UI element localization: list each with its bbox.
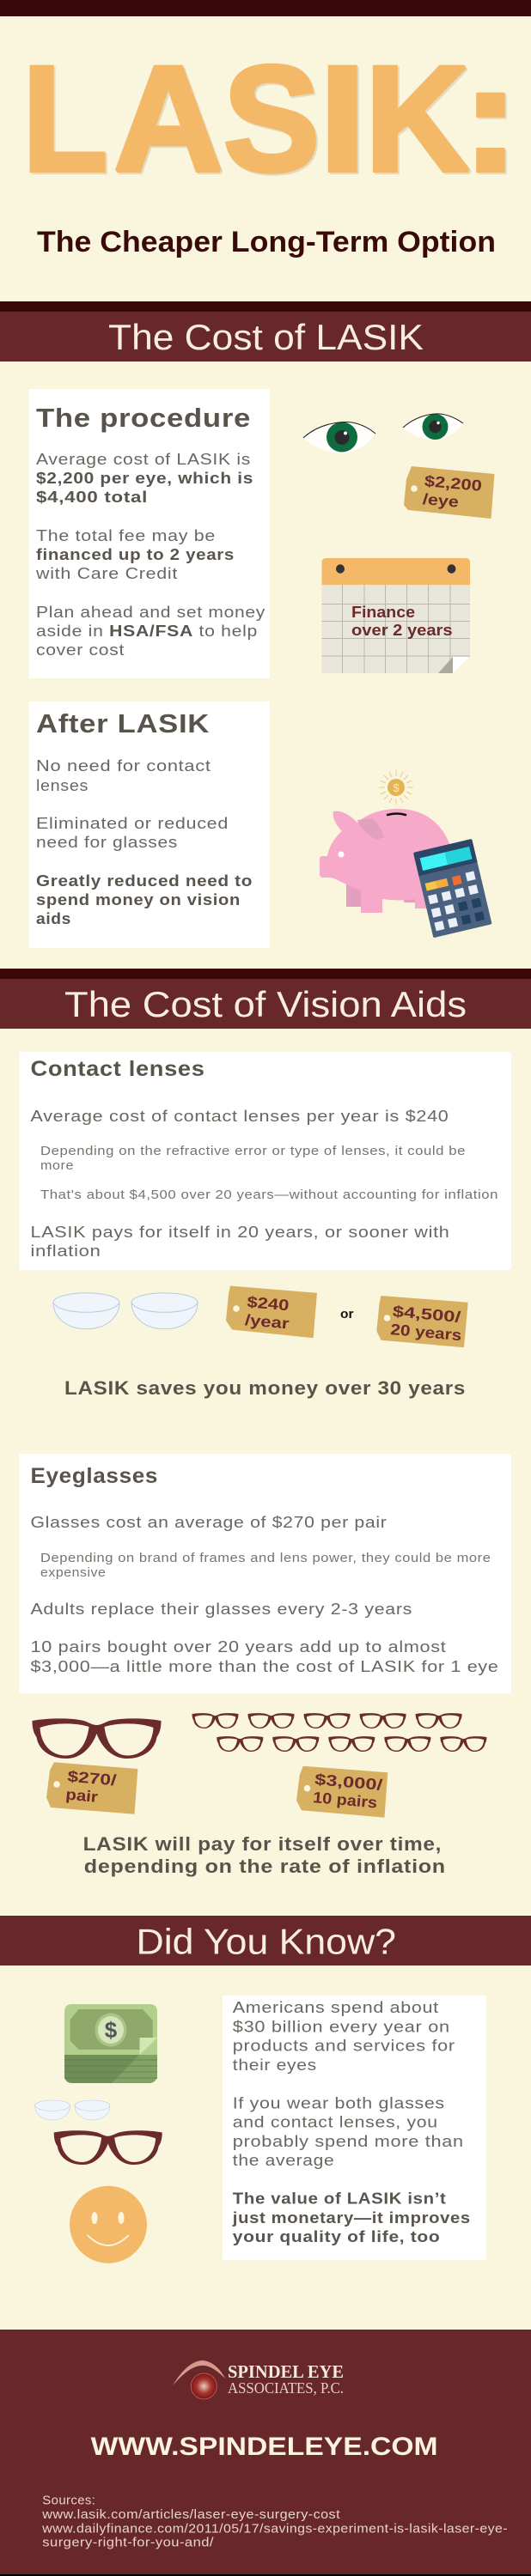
price tag: $2,200 per eye (404, 466, 495, 519)
text: both glasses and contacts: If you wear both glasses (233, 2094, 445, 2112)
sources (41, 2494, 508, 2550)
label: or: or (340, 1307, 354, 1321)
heading: after LASIK: After LASIK (36, 708, 210, 738)
text: 10 pairs total (31, 1637, 498, 1675)
title: LASIK: I (320, 35, 366, 203)
price tag: $2,200 per eye: /eye (422, 490, 460, 511)
text: average cost (36, 450, 253, 506)
price tag: $270 per pair (46, 1762, 137, 1814)
text: Americans spend: their eyes (233, 2056, 317, 2074)
title: LASIK: S (223, 35, 320, 203)
text: replacement rate: Adults replace their glasses every 2-3 years (31, 1600, 412, 1618)
sources: Sources: (42, 2494, 95, 2508)
text: Americans spend: $30 billion every year on (233, 2018, 450, 2036)
title: LASIK (22, 34, 519, 203)
title: LASIK: : (462, 34, 519, 203)
icon: contact lenses pair (53, 1293, 198, 1329)
text: LASIK pays for itself (31, 1223, 450, 1260)
price tag: $4,500 per 20 years: 20 years (390, 1321, 462, 1344)
heading: contact lenses: Contact lenses (31, 1057, 204, 1081)
text: 20 year total: That's about $4,500 over 20 years—without accounting for inflation (40, 1188, 498, 1202)
text: reduced glasses: Eliminated or reduced (36, 814, 229, 832)
icon: calendar: over 2 years (351, 622, 453, 639)
text: both glasses and contacts: probably spend more than (233, 2132, 464, 2150)
price tag: $3,000 per 10 pairs: 10 pairs (312, 1789, 378, 1812)
text: both glasses and contacts (233, 2094, 464, 2169)
icon: smiley face (70, 2186, 147, 2263)
price tag: $240 per year: $240 (247, 1293, 290, 1314)
sources: www.dailyfinance.com/2011/05/17/savings-experiment-is-lasik-laser-eye- (41, 2521, 508, 2536)
panel: after LASIK (29, 702, 270, 948)
text: reduced spending: aids (36, 909, 71, 927)
text: value of LASIK: your quality of life, too (233, 2227, 440, 2245)
section banner: Did You Know? (0, 1916, 531, 1965)
footer (0, 2330, 531, 2576)
icon: green eyes (303, 414, 463, 453)
price tag: $270 per pair: pair (65, 1786, 99, 1806)
text: Americans spend: products and services for (233, 2037, 455, 2055)
text: reduced glasses: need for glasses (36, 833, 178, 851)
section banner: Did You Know?: Did You Know? (136, 1922, 396, 1962)
price tag: $270 per pair: $270/ (67, 1768, 117, 1789)
title: LASIK: K (365, 35, 469, 203)
heading: eyeglasses: Eyeglasses (31, 1464, 158, 1488)
icon: stack of money: $ (105, 2017, 118, 2043)
title: LASIK: A (113, 35, 223, 203)
text: HSA/FSA (36, 603, 266, 659)
text: depends on frames (40, 1552, 491, 1580)
icon: stack of money (64, 2004, 157, 2083)
text: financing: The total fee may be (36, 526, 216, 544)
panel: did you know facts (223, 1996, 486, 2260)
text: both glasses and contacts: and contact lenses, you (233, 2113, 438, 2131)
text: average cost: Average cost of LASIK is (36, 450, 251, 468)
text: value of LASIK (232, 2190, 471, 2245)
icon: piggy bank (320, 809, 455, 913)
icon: ten pairs of glasses (192, 1713, 486, 1752)
logo: Spindel Eye Associates: ASSOCIATES, P.C. (228, 2379, 344, 2397)
panel: the procedure (29, 389, 270, 678)
subtitle: The Cheaper Long-Term Option (37, 226, 496, 258)
sources: www.lasik.com/articles/laser-eye-surgery-cost (41, 2507, 340, 2522)
price tag: $3,000 per 10 pairs: $3,000/ (314, 1771, 383, 1794)
top bar (0, 0, 531, 16)
text: average cost: $2,200 per eye, which is (36, 469, 253, 487)
icon: large glasses (33, 1718, 162, 1759)
price tag: $240 per year (226, 1286, 317, 1338)
text: value of LASIK: just monetary—it improves (232, 2208, 471, 2227)
heading: the procedure: The procedure (36, 403, 251, 433)
section banner: The Cost of LASIK: The Cost of LASIK (108, 317, 424, 357)
logo: Spindel Eye Associates (173, 2360, 344, 2399)
text: value of LASIK: The value of LASIK isn’t (233, 2190, 447, 2208)
callout: LASIK will pay for itself: depending on the rate of inflation (84, 1856, 446, 1877)
text: reduced spending (36, 872, 253, 927)
text: financing: financed up to 2 years (36, 545, 235, 563)
text: HSA/FSA: Plan ahead and set money (36, 603, 266, 621)
callout: LASIK will pay for itself: LASIK will pay for itself over time, (83, 1833, 442, 1855)
icon: coin (379, 770, 413, 805)
text: no contact lenses: No need for contact (36, 756, 211, 775)
text: depends on refractive error: more (40, 1159, 74, 1173)
price tag: $3,000 per 10 pairs (296, 1766, 388, 1818)
text: depends on frames: Depending on brand of frames and lens power, they could be more (40, 1552, 491, 1565)
text: Americans spend: Americans spend about (233, 1998, 439, 2016)
icon: small contact lenses (35, 2100, 110, 2120)
text: both glasses and contacts: the average (233, 2151, 334, 2169)
text: financing (35, 526, 235, 582)
text: depends on refractive error (40, 1145, 466, 1173)
text: HSA/FSA: aside in HSA/FSA to help (36, 622, 258, 640)
text: LASIK pays for itself: LASIK pays for itself in 20 years, or sooner with (31, 1223, 450, 1241)
text: reduced glasses (36, 814, 229, 851)
sources: surgery-right-for-you-and/ (42, 2536, 214, 2550)
icon: coin: $ (393, 781, 400, 794)
panel: contact lenses (19, 1052, 511, 1270)
callout: LASIK saves you money: LASIK saves you money over 30 years (64, 1377, 466, 1399)
text: 10 pairs total: 10 pairs bought over 20 years add up to almost (31, 1637, 447, 1656)
icon: calendar (321, 558, 470, 673)
panel: eyeglasses (19, 1454, 511, 1693)
text: reduced spending: Greatly reduced need to (36, 872, 253, 890)
icon: glasses (54, 2130, 162, 2165)
website address: WWW.SPINDELEYE.COM (91, 2433, 438, 2461)
title: LASIK: L (22, 34, 107, 203)
section banner: The Cost of LASIK (0, 301, 531, 361)
logo: Spindel Eye Associates: SPINDEL EYE (228, 2361, 344, 2382)
price tag: $2,200 per eye: $2,200 (424, 472, 483, 495)
text: glasses cost: Glasses cost an average of $270 per pair (31, 1513, 387, 1531)
calendar page curl (438, 657, 471, 673)
text: HSA/FSA: cover cost (36, 641, 125, 659)
text: average cost: $4,400 total (36, 488, 148, 506)
price tag: $240 per year: /year (244, 1311, 290, 1332)
section banner: The Cost of Vision Aids (0, 969, 531, 1029)
text: 10 pairs total: $3,000—a little more than the cost of LASIK for 1 eye (31, 1657, 498, 1675)
text: depends on refractive error: Depending on the refractive error or type of lenses, it could be (40, 1145, 466, 1158)
icon: calculator (413, 839, 492, 938)
text: LASIK pays for itself: inflation (31, 1242, 101, 1260)
text: Americans spend (233, 1998, 455, 2074)
text: no contact lenses: lenses (36, 776, 88, 794)
text: depends on frames: expensive (40, 1566, 106, 1580)
icon: calendar: Finance (351, 604, 415, 621)
text: financing: with Care Credit (35, 564, 178, 582)
price tag: $4,500 per 20 years: $4,500/ (392, 1303, 461, 1326)
section banner: The Cost of Vision Aids: The Cost of Vision Aids (64, 984, 467, 1024)
text: reduced spending: spend money on vision (36, 890, 241, 908)
text: no contact lenses (36, 756, 211, 794)
callout: LASIK will pay for itself (83, 1833, 446, 1877)
price tag: $4,500 per 20 years (376, 1296, 468, 1347)
text: average cost of lenses: Average cost of contact lenses per year is $240 (31, 1107, 449, 1125)
